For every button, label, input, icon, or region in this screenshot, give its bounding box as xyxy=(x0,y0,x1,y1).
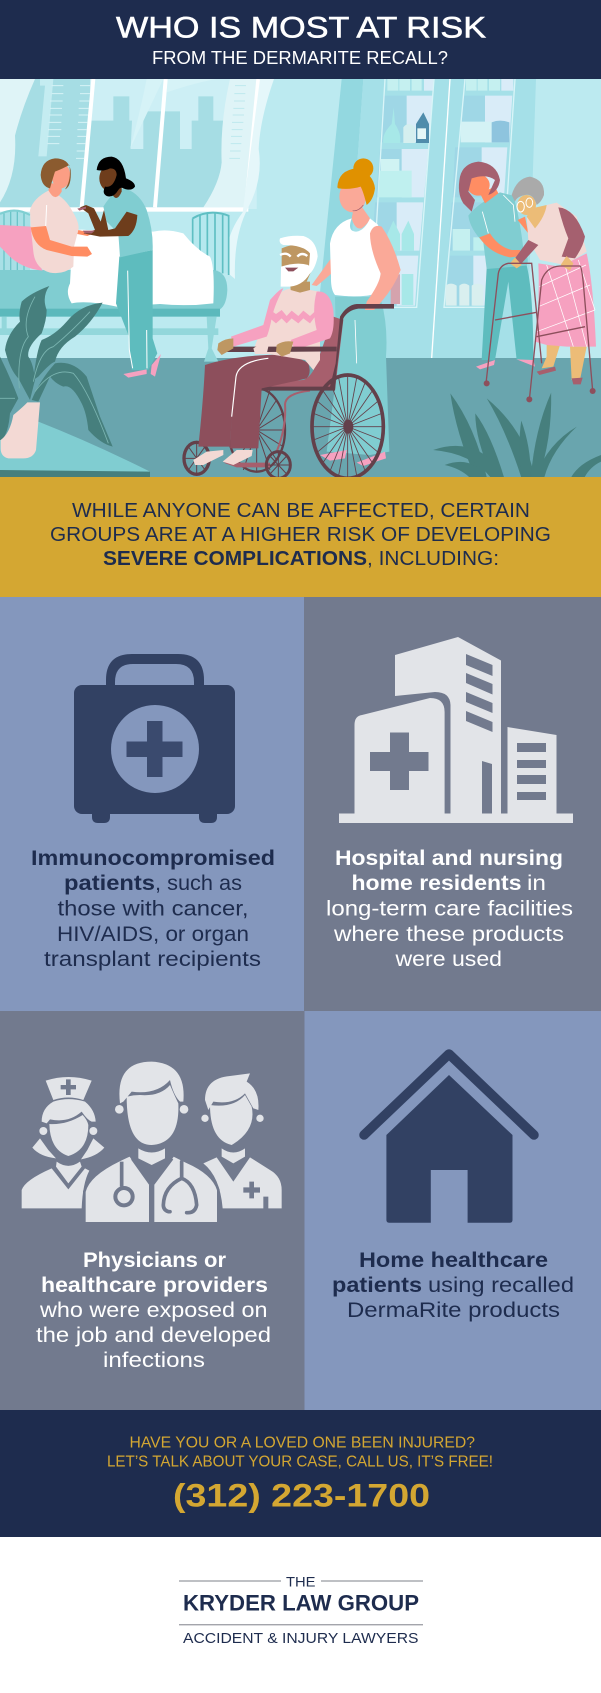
potted plant left xyxy=(0,286,150,477)
text: immunocompromised patients: , such as xyxy=(155,872,242,895)
pillars and medicine cabinets xyxy=(313,79,536,358)
intro text: WHILE ANYONE CAN BE AFFECTED, CERTAIN xyxy=(72,500,530,522)
call to action band xyxy=(0,1410,601,1537)
text: physicians or healthcare providers: healthcare providers xyxy=(41,1274,268,1297)
intro text xyxy=(50,500,551,570)
text: physicians or healthcare providers xyxy=(36,1249,271,1372)
icon: hospital building xyxy=(339,637,573,823)
caregiver and elderly woman with walker xyxy=(459,162,596,402)
intro text: , INCLUDING: xyxy=(367,548,499,570)
icon: house xyxy=(364,1054,534,1223)
hospital bed xyxy=(0,210,229,362)
text: hospital and nursing home residents: in xyxy=(527,872,546,895)
blonde carer pushing wheelchair xyxy=(312,158,401,466)
wheelchair and elderly man xyxy=(184,236,394,478)
text: physicians or healthcare providers: infections xyxy=(103,1349,205,1372)
patient in bed xyxy=(30,158,93,273)
text: immunocompromised patients: HIV/AIDS, or organ xyxy=(57,923,249,946)
text: hospital and nursing home residents: home residents xyxy=(352,872,522,895)
window with city view xyxy=(0,79,274,279)
text: immunocompromised patients: those with cancer, xyxy=(58,898,248,920)
intro text: SEVERE COMPLICATIONS xyxy=(103,548,367,570)
icon: male nurse figure xyxy=(201,1073,282,1208)
title: WHO IS MOST AT RISK xyxy=(116,12,486,44)
logo: The Kryder Law Group: ACCIDENT & INJURY LAWYERS xyxy=(183,1630,418,1647)
call to action text: LET’S TALK ABOUT YOUR CASE, CALL US, IT’S FREE! xyxy=(107,1454,493,1470)
phone number: (312) 223-1700 xyxy=(173,1478,430,1514)
text: home healthcare patients: DermaRite products xyxy=(347,1299,560,1322)
text: hospital and nursing home residents: where these products xyxy=(333,923,564,946)
text: immunocompromised patients xyxy=(31,847,275,971)
logo: The Kryder Law Group: KRYDER LAW GROUP xyxy=(183,1591,419,1616)
text: home healthcare patients xyxy=(332,1249,574,1322)
text: immunocompromised patients: patients xyxy=(64,872,155,895)
nurse with dark hair xyxy=(77,157,161,378)
icon: nurse figure xyxy=(22,1077,104,1208)
panel: physicians and healthcare providers xyxy=(0,1011,304,1410)
text: hospital and nursing home residents xyxy=(326,847,573,971)
text: physicians or healthcare providers: who were exposed on xyxy=(39,1299,268,1322)
call to action text: HAVE YOU OR A LOVED ONE BEEN INJURED? xyxy=(130,1434,475,1452)
text: hospital and nursing home residents: were used xyxy=(394,948,502,971)
logo: The Kryder Law Group xyxy=(179,1574,423,1647)
call to action text xyxy=(107,1434,493,1470)
text: hospital and nursing home residents: long-term care facilities xyxy=(326,898,573,920)
icon: doctor figure xyxy=(84,1062,218,1223)
icon: medical kit xyxy=(74,654,235,823)
plant right xyxy=(433,393,601,477)
intro band xyxy=(0,477,601,597)
text: immunocompromised patients: transplant recipients xyxy=(44,948,261,971)
text: hospital and nursing home residents: Hospital and nursing xyxy=(335,847,563,870)
panel: hospital and nursing home residents xyxy=(304,597,601,1011)
intro text: GROUPS ARE AT A HIGHER RISK OF DEVELOPING xyxy=(50,524,551,546)
panel: immunocompromised patients xyxy=(0,597,304,1011)
text: home healthcare patients: using recalled xyxy=(428,1274,574,1297)
text: physicians or healthcare providers: Physicians or xyxy=(83,1249,226,1272)
panel: home healthcare patients xyxy=(304,1011,601,1410)
icon: medical team xyxy=(22,1062,282,1223)
illustration: hospital care scene xyxy=(0,79,601,478)
header band xyxy=(0,0,601,79)
logo: The Kryder Law Group: THE xyxy=(286,1574,316,1590)
floor xyxy=(0,358,601,478)
text: physicians or healthcare providers: the job and developed xyxy=(36,1324,271,1347)
text: home healthcare patients: Home healthcare xyxy=(359,1249,548,1272)
subtitle: FROM THE DERMARITE RECALL? xyxy=(152,48,448,68)
text: immunocompromised patients: Immunocompromised xyxy=(31,847,275,870)
text: home healthcare patients: patients xyxy=(332,1274,422,1297)
